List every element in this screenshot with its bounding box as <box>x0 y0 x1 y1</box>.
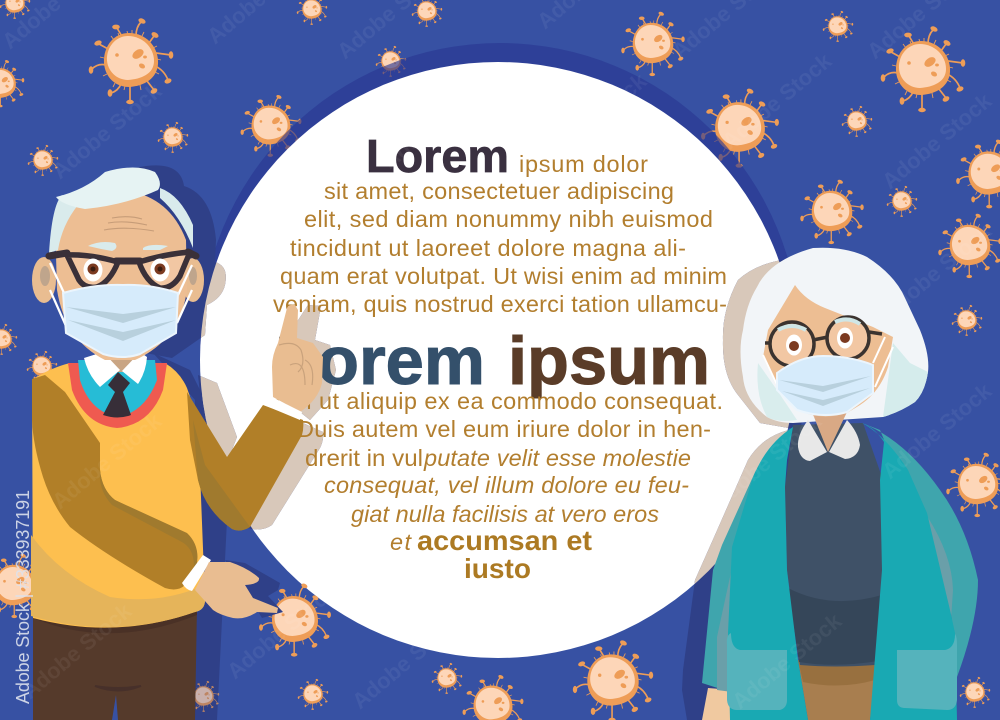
text block: lower paragraph <box>275 388 723 584</box>
stock watermark text: Adobe Stock <box>727 608 847 714</box>
icon: virus <box>881 25 965 112</box>
lower cuff <box>182 555 211 591</box>
woman figure <box>702 248 978 720</box>
icon: virus <box>241 94 301 157</box>
icon: virus <box>960 677 990 708</box>
icon: virus <box>952 305 982 336</box>
collar <box>798 420 860 461</box>
stock watermark text: Adobe Stock <box>47 408 167 514</box>
icon: virus <box>887 186 917 217</box>
trousers <box>33 605 197 720</box>
icon: virus <box>842 106 872 137</box>
woman shadow on white circle <box>694 260 790 584</box>
text block: lower paragraph: accumsan et <box>417 525 592 556</box>
mask straps <box>50 263 192 326</box>
pointing hand <box>195 562 278 618</box>
text block: lower paragraph: et <box>390 529 412 555</box>
text block: upper paragraph <box>273 130 727 317</box>
cardigan panels <box>728 423 957 720</box>
stock watermark text: Adobe Stock <box>547 248 667 354</box>
icon: virus <box>376 46 406 77</box>
man shadow on background <box>135 165 336 720</box>
icon: virus <box>463 674 523 720</box>
icon: virus <box>0 324 17 355</box>
text block: lower paragraph: iusto <box>464 553 531 584</box>
eyebrows <box>88 242 168 251</box>
stock watermark text: Adobe Stock <box>47 78 167 184</box>
eyes <box>84 258 170 282</box>
icon: virus <box>800 179 864 244</box>
pockets <box>727 633 957 710</box>
man shadow on white circle <box>200 262 336 530</box>
text block: lower paragraph: consequat, vel illum dolore eu feu- <box>324 472 689 498</box>
icon: virus touched by finger <box>259 583 331 657</box>
heading: Lorem: Lorem <box>366 130 509 182</box>
text block: upper paragraph: tincidunt ut laoreet dolore magna ali- <box>290 235 686 261</box>
text block: lower paragraph: putate velit esse molestie <box>423 445 691 471</box>
stock watermark text: Adobe Stock <box>707 408 827 514</box>
icon: virus <box>158 122 188 153</box>
heading: Lorem ipsum: ipsum <box>508 323 710 399</box>
mask straps <box>763 337 893 387</box>
icon: virus <box>823 11 853 42</box>
text block: lower paragraph: drerit in vul <box>305 445 423 471</box>
icon: virus <box>27 351 57 382</box>
stock watermark text: Adobe Stock <box>222 578 342 684</box>
icon: virus <box>946 452 1000 517</box>
stock watermark text: Adobe Stock <box>717 48 837 154</box>
face <box>56 190 187 360</box>
icon: shaded virus <box>189 681 219 712</box>
hair <box>49 168 193 253</box>
stock watermark text: Adobe Stock <box>532 68 652 174</box>
ears <box>32 257 204 303</box>
cardigan sleeves <box>702 423 978 692</box>
glasses <box>49 252 196 288</box>
face mask <box>777 356 873 415</box>
stock watermark text: Adobe Stock <box>377 68 497 174</box>
icon: virus <box>28 145 58 176</box>
skirt <box>798 660 878 720</box>
stock watermark text: Adobe Stock <box>557 548 677 654</box>
icon: virus <box>432 663 462 694</box>
stock watermark text: Adobe Stock <box>877 88 997 194</box>
upper cuff <box>264 397 302 420</box>
forehead wrinkles <box>104 217 154 231</box>
stock id label: Adobe Stock | #333937191 <box>13 490 33 704</box>
woman shadow on background <box>682 258 830 720</box>
text block: upper paragraph: sit amet, consectetuer adipiscing <box>324 178 674 204</box>
text block: upper paragraph: elit, sed diam nonummy nibh euismod <box>304 206 713 232</box>
face <box>763 285 893 416</box>
text block: upper paragraph: quam erat volutpat. Ut wisi enim ad minim <box>280 263 727 289</box>
stock watermark text: Adobe Stock <box>877 378 997 484</box>
text block: upper paragraph: veniam, quis nostrud exerci tation ullamcu- <box>273 291 727 317</box>
hair <box>740 248 928 423</box>
raised hand <box>272 305 323 412</box>
heading: Lorem ipsum <box>275 323 710 399</box>
icon: virus <box>89 17 173 104</box>
dark top <box>785 423 883 666</box>
icon: virus <box>956 139 1000 208</box>
text block: upper paragraph: ipsum dolor <box>519 151 648 177</box>
icon: virus <box>297 0 327 25</box>
white circle panel <box>200 62 796 658</box>
hand <box>702 688 736 720</box>
neck <box>812 412 847 452</box>
heading: Lorem ipsum: Lorem <box>275 323 485 399</box>
icon: virus <box>573 639 653 720</box>
text block: lower paragraph: nisi ut aliquip ex ea commodo consequat. <box>275 388 723 414</box>
icon: virus <box>0 59 24 107</box>
text block: lower paragraph: Duis autem vel eum iriure dolor in hen- <box>297 416 711 442</box>
sweater collar and shirt <box>68 352 167 428</box>
icon: virus <box>298 679 328 710</box>
icon: virus <box>938 213 1000 278</box>
icon: virus <box>0 0 30 19</box>
icon: virus <box>621 11 685 76</box>
sweater <box>31 363 205 628</box>
stock watermark text: Adobe Stock <box>17 598 137 704</box>
icon: virus <box>701 88 779 168</box>
near arm <box>32 375 197 589</box>
icon: virus <box>412 0 442 27</box>
far arm <box>187 392 303 531</box>
icon: virus <box>0 553 47 618</box>
stock watermark text: Adobe Stock <box>877 218 997 324</box>
stock watermark text: Adobe Stock <box>212 248 332 354</box>
text block: lower paragraph: giat nulla facilisis at vero eros <box>351 501 659 527</box>
glasses <box>765 317 882 366</box>
man figure <box>31 168 323 720</box>
stock watermark text: Adobe Stock <box>347 608 467 714</box>
circle shadow <box>200 43 800 643</box>
eyes <box>778 319 860 356</box>
face mask <box>63 285 178 357</box>
